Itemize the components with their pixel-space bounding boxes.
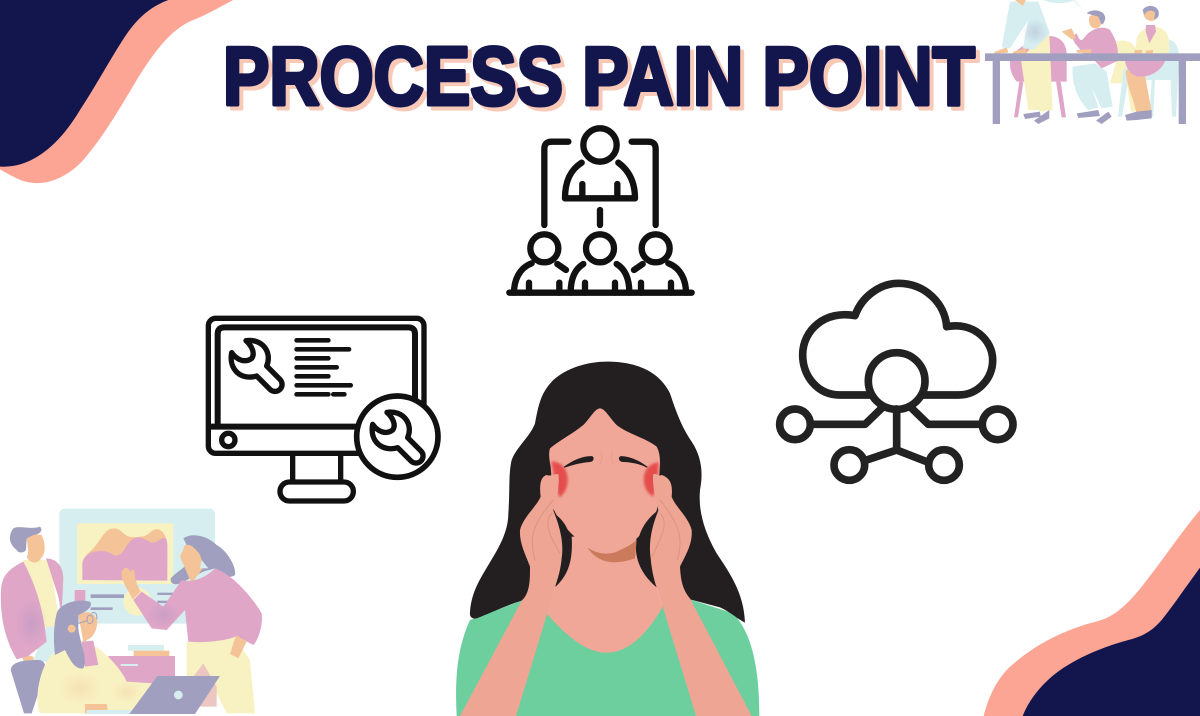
finger lines: [532, 500, 680, 560]
neck: [547, 537, 663, 653]
man: [23, 560, 60, 643]
left arm and hand: [460, 474, 562, 716]
chin shadow: [587, 540, 637, 562]
bottom-right corner wave: [984, 510, 1200, 716]
seated man: [1073, 63, 1113, 110]
title: PROCESS PAIN POINT: [227, 34, 979, 126]
nose bridge lines: [599, 452, 614, 464]
top-left corner wave: [0, 0, 233, 183]
pink chair: [1010, 36, 1067, 82]
hair: [470, 362, 745, 623]
temple pain right: [644, 462, 659, 497]
laptop: [87, 710, 133, 714]
woman standing: [187, 635, 255, 713]
face: [549, 408, 660, 553]
icon: cloud network: [780, 283, 1013, 480]
right chair: [1110, 41, 1137, 83]
illustration: stressed woman: [456, 362, 759, 716]
board text lines: [75, 590, 85, 610]
icon: team hierarchy: [509, 128, 692, 293]
speech bubble: [1043, 0, 1083, 10]
hair pockets: [550, 513, 571, 586]
woman seated: [37, 640, 153, 713]
right arm and hand: [650, 474, 752, 716]
table: [985, 53, 1200, 61]
chart areas: [86, 528, 167, 567]
temple pain left: [551, 461, 568, 498]
presentation board: [59, 509, 215, 624]
desk and drawers: [128, 645, 164, 651]
seated woman: [1135, 26, 1169, 53]
icon: monitor with wrench: [208, 318, 438, 501]
illustration: team presenting chart: [1, 509, 262, 714]
illustration: team at table: [985, 0, 1200, 124]
shirt: [456, 599, 759, 716]
standing woman: [1021, 34, 1053, 112]
glasses: [76, 613, 97, 624]
closed eyes: [564, 457, 593, 467]
title: PROCESS PAIN POINT: [223, 30, 975, 122]
